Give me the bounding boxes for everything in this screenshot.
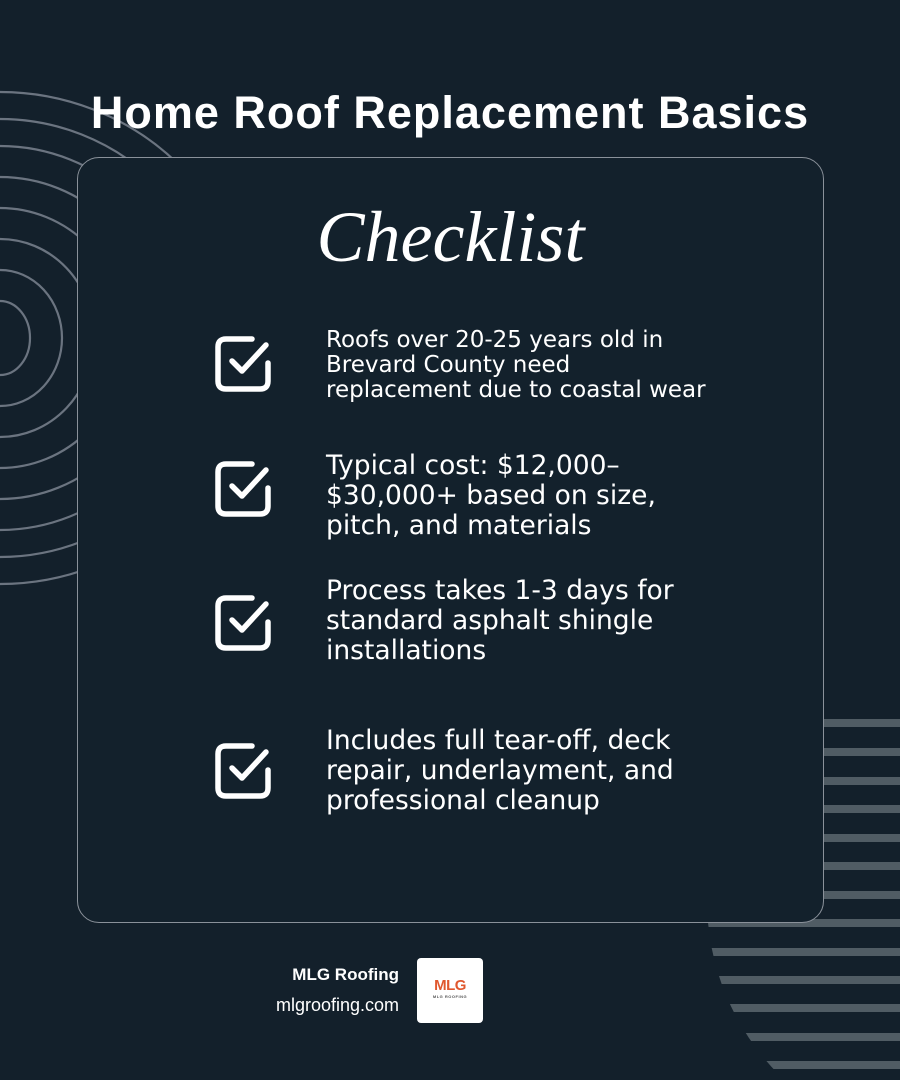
panel: checklist: [77, 157, 824, 923]
icon: logo: MLG: [434, 977, 466, 994]
title: Home Roof Replacement Basics: [91, 87, 809, 138]
text: item 4: professional cleanup: [326, 785, 600, 816]
icon: logo: MLG ROOFING: [433, 994, 467, 999]
text: item 3: [326, 575, 674, 666]
text: item 2: Typical cost: $12,000–: [326, 450, 620, 481]
text: item 4: [326, 725, 674, 816]
text: item 2: $30,000+ based on size,: [326, 480, 656, 511]
text: item 1: Roofs over 20-25 years old in: [326, 327, 663, 353]
footer: brand: [276, 965, 399, 1015]
icon: logo: [417, 958, 483, 1023]
text: item 3: standard asphalt shingle: [326, 605, 653, 636]
icon: checkbox 4: [215, 743, 271, 799]
text: item 3: Process takes 1-3 days for: [326, 575, 674, 606]
icon: checkbox 1: [215, 336, 271, 392]
text: item 2: pitch, and materials: [326, 510, 591, 541]
text: item 4: Includes full tear-off, deck: [326, 725, 671, 756]
icon: checkbox 3: [215, 595, 271, 651]
text: item 3: installations: [326, 635, 486, 666]
footer: brand: MLG Roofing: [292, 965, 399, 984]
text: item 1: [326, 327, 706, 403]
text: item 1: Brevard County need: [326, 352, 570, 378]
text: item 2: [326, 450, 656, 541]
icon: checkbox 2: [215, 461, 271, 517]
text: item 4: repair, underlayment, and: [326, 755, 674, 786]
heading: Checklist: Checklist: [317, 197, 584, 277]
text: item 1: replacement due to coastal wear: [326, 377, 706, 403]
footer: brand: mlgroofing.com: [276, 995, 399, 1015]
